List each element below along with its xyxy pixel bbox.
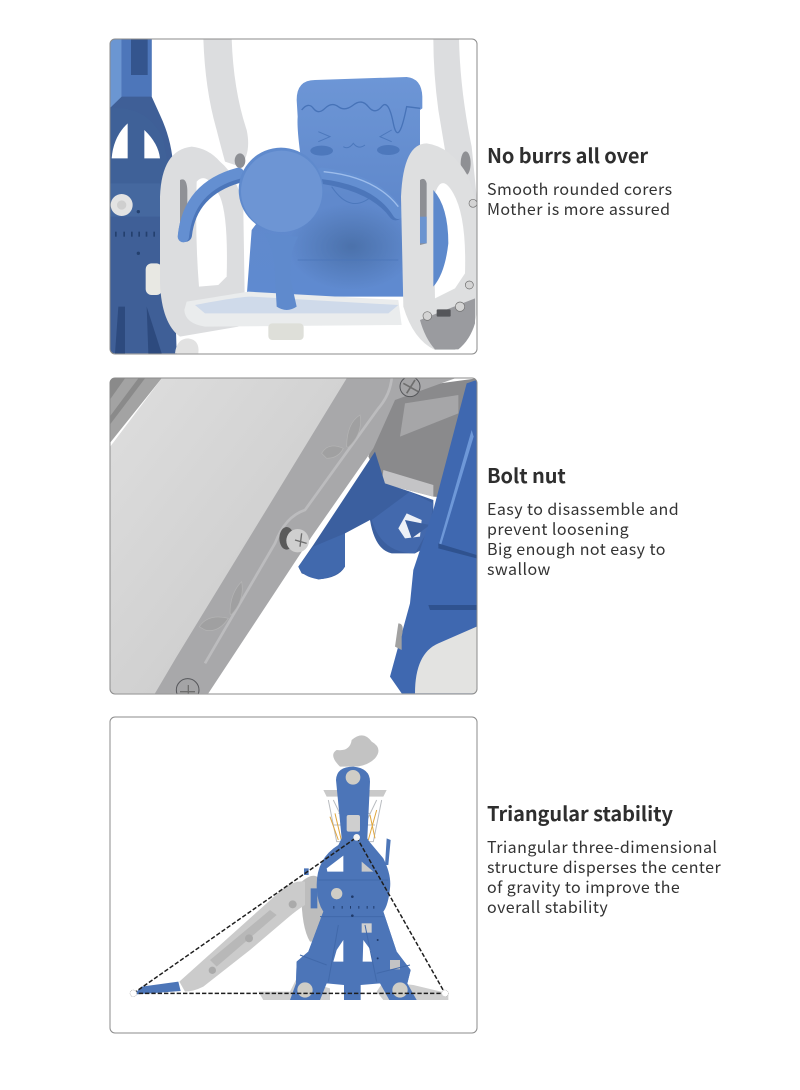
text block: bolt nut: Bolt nut	[487, 460, 566, 489]
base feet	[258, 978, 448, 1000]
text block: triangular stability: Triangular stability	[487, 798, 673, 827]
blue tower right	[390, 380, 477, 693]
text block: no burrs: Mother is more assured	[487, 196, 670, 220]
text block: triangular stability: overall stability	[487, 894, 608, 918]
cloud top	[333, 735, 378, 767]
left side frame	[160, 147, 245, 337]
basketball hoop	[323, 790, 387, 842]
round disc with stem	[239, 148, 323, 310]
text block: no burrs	[487, 140, 672, 220]
text block: no burrs: Smooth rounded corers	[487, 176, 672, 200]
text block: bolt nut: Easy to disassemble and	[487, 496, 679, 520]
text block: bolt nut: Big enough not easy to	[487, 536, 666, 560]
text block: no burrs: No burrs all over	[487, 140, 648, 169]
grey housing behind	[368, 378, 477, 500]
panel: swing seat photo	[110, 38, 477, 354]
text block: triangular stability	[487, 798, 721, 918]
slide surface	[110, 378, 162, 443]
text block: bolt nut: prevent loosening	[487, 516, 629, 540]
dashed stability triangle	[130, 834, 448, 997]
tower at left	[110, 38, 199, 353]
bolt at centre	[279, 527, 309, 552]
text block: bolt nut	[487, 460, 679, 580]
blue handle arc	[185, 176, 396, 235]
right side frame	[401, 143, 477, 350]
blue tower	[290, 767, 417, 1000]
seat platform	[184, 292, 402, 340]
text block: triangular stability: of gravity to improve the	[487, 874, 680, 898]
gray swing arms	[203, 38, 477, 217]
panel: slide bolt photo	[110, 377, 477, 701]
seat back	[247, 77, 422, 297]
blue bracket	[298, 452, 433, 579]
text block: bolt nut: swallow	[487, 556, 551, 580]
slide	[137, 838, 391, 994]
text block: triangular stability: Triangular three-dimensional	[487, 834, 717, 858]
slide rim	[155, 378, 455, 693]
screws	[176, 377, 420, 701]
panel: triangular stability diagram	[110, 717, 477, 1033]
text block: triangular stability: structure disperses the center	[487, 854, 721, 878]
